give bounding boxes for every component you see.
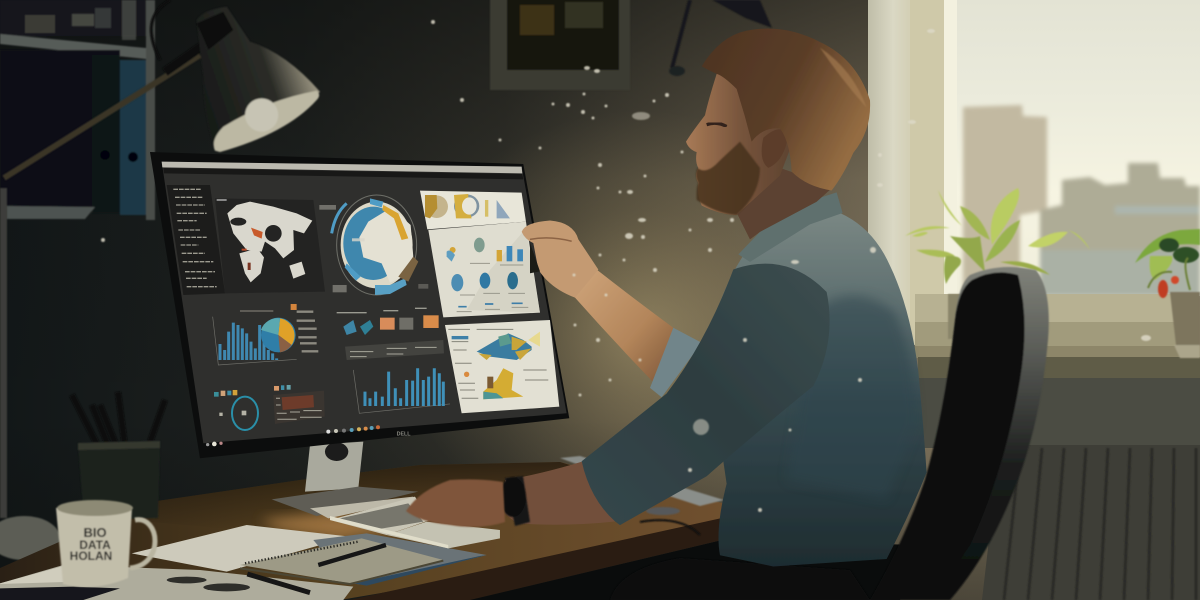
- mug: BIO: [83, 525, 107, 540]
- airborne dust specks: [101, 20, 1151, 512]
- torso shirt: [707, 206, 927, 566]
- ear: [762, 129, 788, 168]
- chair seat: [610, 558, 870, 600]
- light glow on the wall: [400, 110, 880, 550]
- top report: [420, 191, 526, 229]
- screen: [162, 162, 567, 443]
- desk front edge: [350, 518, 722, 600]
- shaded back of desk: [130, 462, 620, 530]
- window bottom frame: [915, 294, 1200, 379]
- pen: [318, 545, 386, 565]
- globe: [319, 195, 428, 295]
- mug: DATA: [79, 538, 111, 552]
- desk surface: [0, 462, 730, 600]
- keyboard: [330, 497, 500, 548]
- sidebar menu: [167, 185, 225, 295]
- desk lamp: [0, 0, 320, 560]
- beard: [696, 142, 760, 215]
- right window plant and pot: [1135, 229, 1200, 358]
- window jamb and frame: [868, 0, 957, 345]
- typing hand: [406, 479, 505, 527]
- left window plant: [905, 188, 1090, 339]
- monitor: [150, 152, 569, 458]
- neck: [735, 168, 833, 239]
- desk cables and right-side paper: [560, 456, 724, 535]
- shirt cuff: [650, 328, 702, 397]
- forearm: [505, 461, 617, 525]
- lamp shade: [197, 7, 320, 152]
- gauge ring widget: [214, 390, 258, 430]
- raised arm: [522, 221, 673, 382]
- hair: [702, 29, 870, 190]
- shelves with binders: [0, 0, 155, 220]
- drawing sheet: [132, 525, 350, 572]
- desk: [0, 462, 920, 600]
- alert table panel: [273, 385, 325, 424]
- man: [505, 29, 927, 566]
- white report panels: [420, 191, 559, 413]
- chair backrest dark front: [870, 272, 1025, 600]
- brand label: DELL: [397, 432, 411, 438]
- glass sky: [957, 0, 1200, 296]
- back shadow: [787, 296, 917, 499]
- window: [868, 0, 1200, 600]
- bottom printed sheet: [0, 565, 353, 600]
- bezel: [150, 152, 569, 458]
- wristwatch: [500, 476, 530, 526]
- mug: HOLAN: [70, 549, 112, 563]
- lamp pole and base: [0, 188, 60, 560]
- blue folder: [313, 533, 487, 585]
- data table strip: [345, 340, 444, 360]
- sunlit wood patch: [260, 512, 420, 540]
- taskbar icons: [206, 425, 380, 446]
- second marker: [247, 574, 310, 593]
- office chair: [610, 267, 1049, 600]
- collar: [738, 192, 843, 262]
- window title bar: [162, 162, 522, 173]
- eye shadow: [707, 123, 727, 127]
- face: [686, 66, 800, 215]
- chair backrest: [870, 267, 1049, 600]
- wall below window: [918, 378, 1200, 448]
- hand on screen: [522, 221, 598, 298]
- lower bar chart: [353, 368, 450, 413]
- mug: [56, 500, 155, 587]
- monitor stand: [272, 442, 418, 518]
- radiator: [982, 445, 1200, 600]
- bar and pie chart: [213, 304, 318, 365]
- sleeve lower arm: [582, 264, 830, 525]
- lamp arm: [4, 0, 208, 178]
- pen holder with pens: [72, 392, 165, 520]
- world map panel: [215, 198, 325, 293]
- desk papers and notebook: [0, 525, 487, 600]
- shadow under the desk: [470, 540, 920, 600]
- lower report: [445, 320, 559, 413]
- spiral notebook: [240, 538, 443, 584]
- wall poster and second lamp arm: [490, 0, 772, 90]
- middle report: [428, 222, 540, 317]
- regional maps row: [337, 308, 439, 335]
- city skyline: [963, 105, 1200, 296]
